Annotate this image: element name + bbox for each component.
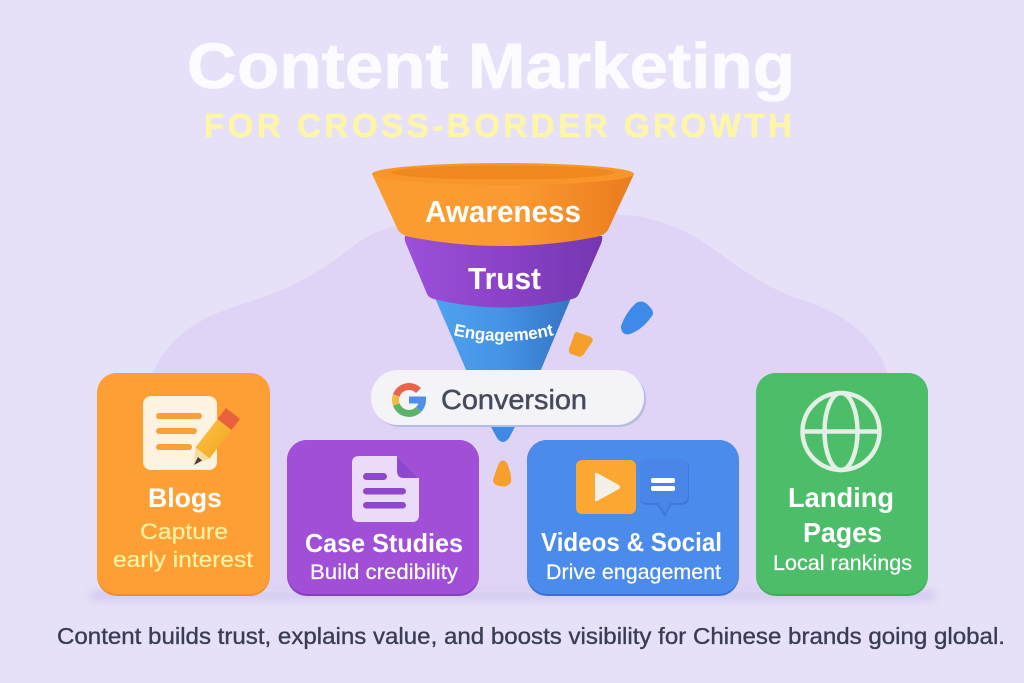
funnel: trust: Trust [468, 261, 541, 296]
funnel [372, 163, 634, 442]
confetti: blue [621, 302, 653, 334]
card: videos and social: Videos & Social [541, 527, 722, 557]
funnel spout [490, 425, 516, 442]
card: case studies: Build credibility [310, 561, 459, 584]
search bar: conversion [371, 370, 646, 427]
caption: Content builds trust, explains value, and boosts visibility for Chinese brands going global. [57, 623, 1005, 649]
funnel: engagement [436, 299, 570, 370]
icon: notepad and pencil [143, 396, 240, 470]
card: videos and social [527, 440, 739, 596]
funnel: trust [405, 236, 602, 308]
card: blogs [97, 373, 270, 596]
funnel: awareness [372, 163, 634, 246]
shadow under cards [90, 591, 935, 600]
card: blogs: early interest [113, 547, 253, 572]
title: FOR CROSS-BORDER GROWTH [204, 107, 792, 144]
icon: document [352, 456, 419, 522]
confetti: orange bottom [493, 460, 511, 486]
background mountain shape [153, 214, 887, 590]
icon: video and chat [576, 459, 689, 517]
title: Content Marketing [187, 30, 795, 102]
funnel: engagement: Engagement [454, 324, 554, 345]
confetti: orange top [569, 332, 593, 357]
search bar: conversion: Conversion [441, 384, 587, 415]
icon: globe [802, 393, 880, 470]
card: landing pages: Landing [788, 482, 894, 513]
card: blogs: Blogs [148, 483, 222, 513]
icon: google G [395, 387, 422, 413]
card: blogs: Capture [140, 519, 228, 544]
title [187, 30, 795, 144]
card: case studies [287, 440, 479, 596]
funnel: awareness: Awareness [425, 194, 581, 229]
card: videos and social: Drive engagement [546, 561, 721, 584]
card: landing pages: Pages [803, 517, 882, 548]
card: landing pages [756, 373, 928, 596]
card: landing pages: Local rankings [773, 552, 912, 575]
card: case studies: Case Studies [305, 528, 463, 558]
